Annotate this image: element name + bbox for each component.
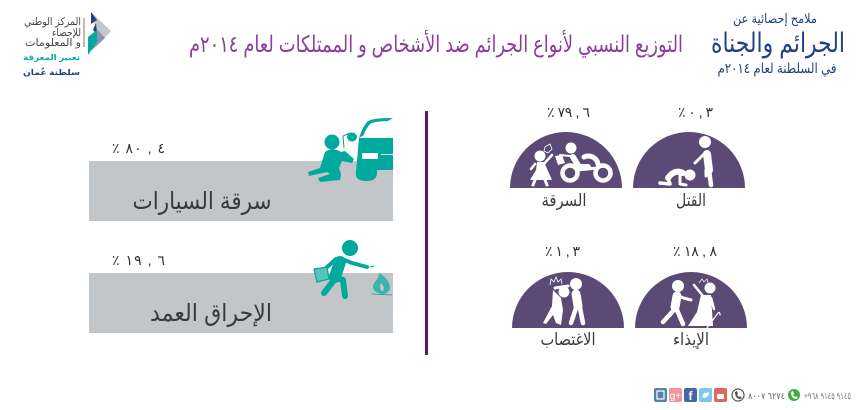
logo divider (84, 18, 85, 47)
icon: thief and car (308, 118, 393, 182)
icon: arsonist (314, 240, 392, 296)
logo name: للإحصاء (52, 27, 81, 39)
percentage: robbery: ٪ ٧٩ , ٦ (547, 104, 590, 120)
percentage: assault: ٪ ١٨ , ٨ (673, 243, 717, 259)
grey bar: arson (89, 273, 393, 333)
panel: arson (89, 240, 393, 333)
logo country: سلطنة عُمان (23, 68, 80, 77)
header block (711, 11, 845, 77)
panel: rape (512, 243, 624, 349)
logo name (24, 16, 81, 49)
panel: car theft (89, 118, 393, 221)
semicircle: murder (633, 132, 745, 188)
logo mark (88, 12, 111, 55)
semicircle: robbery (510, 132, 622, 188)
icon: two struggling figures (543, 277, 583, 325)
main title: التوزيع النسبي لأنواع الجرائم ضد الأشخاص و الممتلكات لعام ٢٠١٤م (189, 30, 683, 58)
label: car theft: سرقة السيارات (132, 188, 272, 215)
panel: assault (635, 243, 747, 349)
label: arson: الإحراق العمد (150, 300, 272, 327)
icon: google plus: g+ (670, 391, 681, 402)
phone number: ٨٠٠٧ ٦٢٧٤ (748, 391, 785, 401)
icon: whatsapp (788, 389, 800, 401)
icon: bag snatching on motorcycle (530, 142, 610, 185)
icon: facebook: f (688, 389, 694, 403)
label: murder: القتل (676, 191, 706, 210)
icon: man pushing elderly woman (663, 279, 720, 328)
icon: twitter (699, 388, 712, 402)
panel: murder (633, 104, 745, 210)
percentage: murder: ٪ ٠ , ٣ (678, 104, 713, 120)
logo name: المركز الوطني (24, 16, 81, 28)
logo slogan: تعبير المعرفة (23, 53, 80, 62)
icon: google plus (669, 388, 682, 402)
icon: youtube (714, 388, 727, 402)
icon: facebook (684, 388, 697, 403)
semicircle: rape (512, 272, 624, 328)
label: rape: الاغتصاب (540, 330, 596, 349)
panel: robbery (510, 104, 622, 210)
footer contact strip (654, 388, 851, 403)
header line 1: ملامح إحصائية عن (733, 11, 817, 27)
logo name: و المعلومات (25, 37, 81, 49)
percentage: car theft: ٪ ٨٠ , ٤ (112, 140, 165, 156)
percentage: rape: ٪ ١ , ٣ (545, 243, 580, 259)
vertical divider (425, 111, 428, 355)
icon: attacker and victim (660, 136, 711, 185)
grey bar: car theft (89, 161, 393, 221)
semicircle: assault (635, 272, 747, 328)
label: assault: الإيذاء (673, 330, 709, 349)
label: robbery: السرقة (542, 191, 586, 210)
logo (23, 12, 111, 77)
icon: phone (732, 389, 744, 401)
icon: instagram (654, 388, 667, 402)
percentage: arson: ٪ ١٩ , ٦ (112, 252, 165, 268)
header line 3: في السلطنة لعام ٢٠١٤م (718, 60, 836, 77)
